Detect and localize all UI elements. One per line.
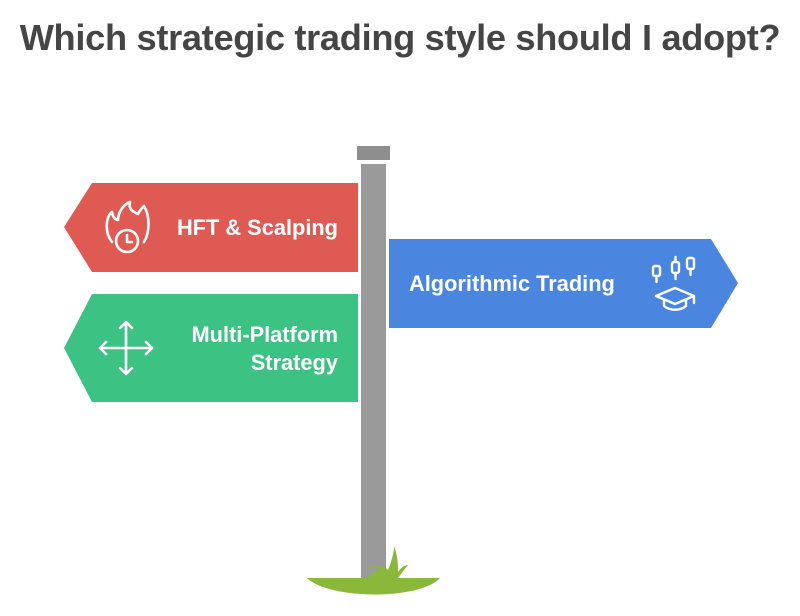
title: Which strategic trading style should I adopt?: [20, 17, 780, 58]
sign: HFT & Scalping: [64, 183, 358, 272]
icon: candlesticks and cap: [653, 257, 694, 310]
label: Multi-Platform: [191, 322, 338, 347]
label: Algorithmic Trading: [409, 271, 615, 296]
sign: Algorithmic Trading: [389, 239, 738, 328]
icon: flame clock: [107, 202, 148, 252]
sign: Multi-Platform Strategy: Strategy: [251, 350, 338, 375]
icon: move arrows: [100, 322, 152, 374]
sign: Multi-Platform Strategy: [64, 294, 358, 402]
pole: [357, 146, 390, 578]
label: HFT & Scalping: [177, 215, 338, 240]
grass: [307, 546, 440, 594]
